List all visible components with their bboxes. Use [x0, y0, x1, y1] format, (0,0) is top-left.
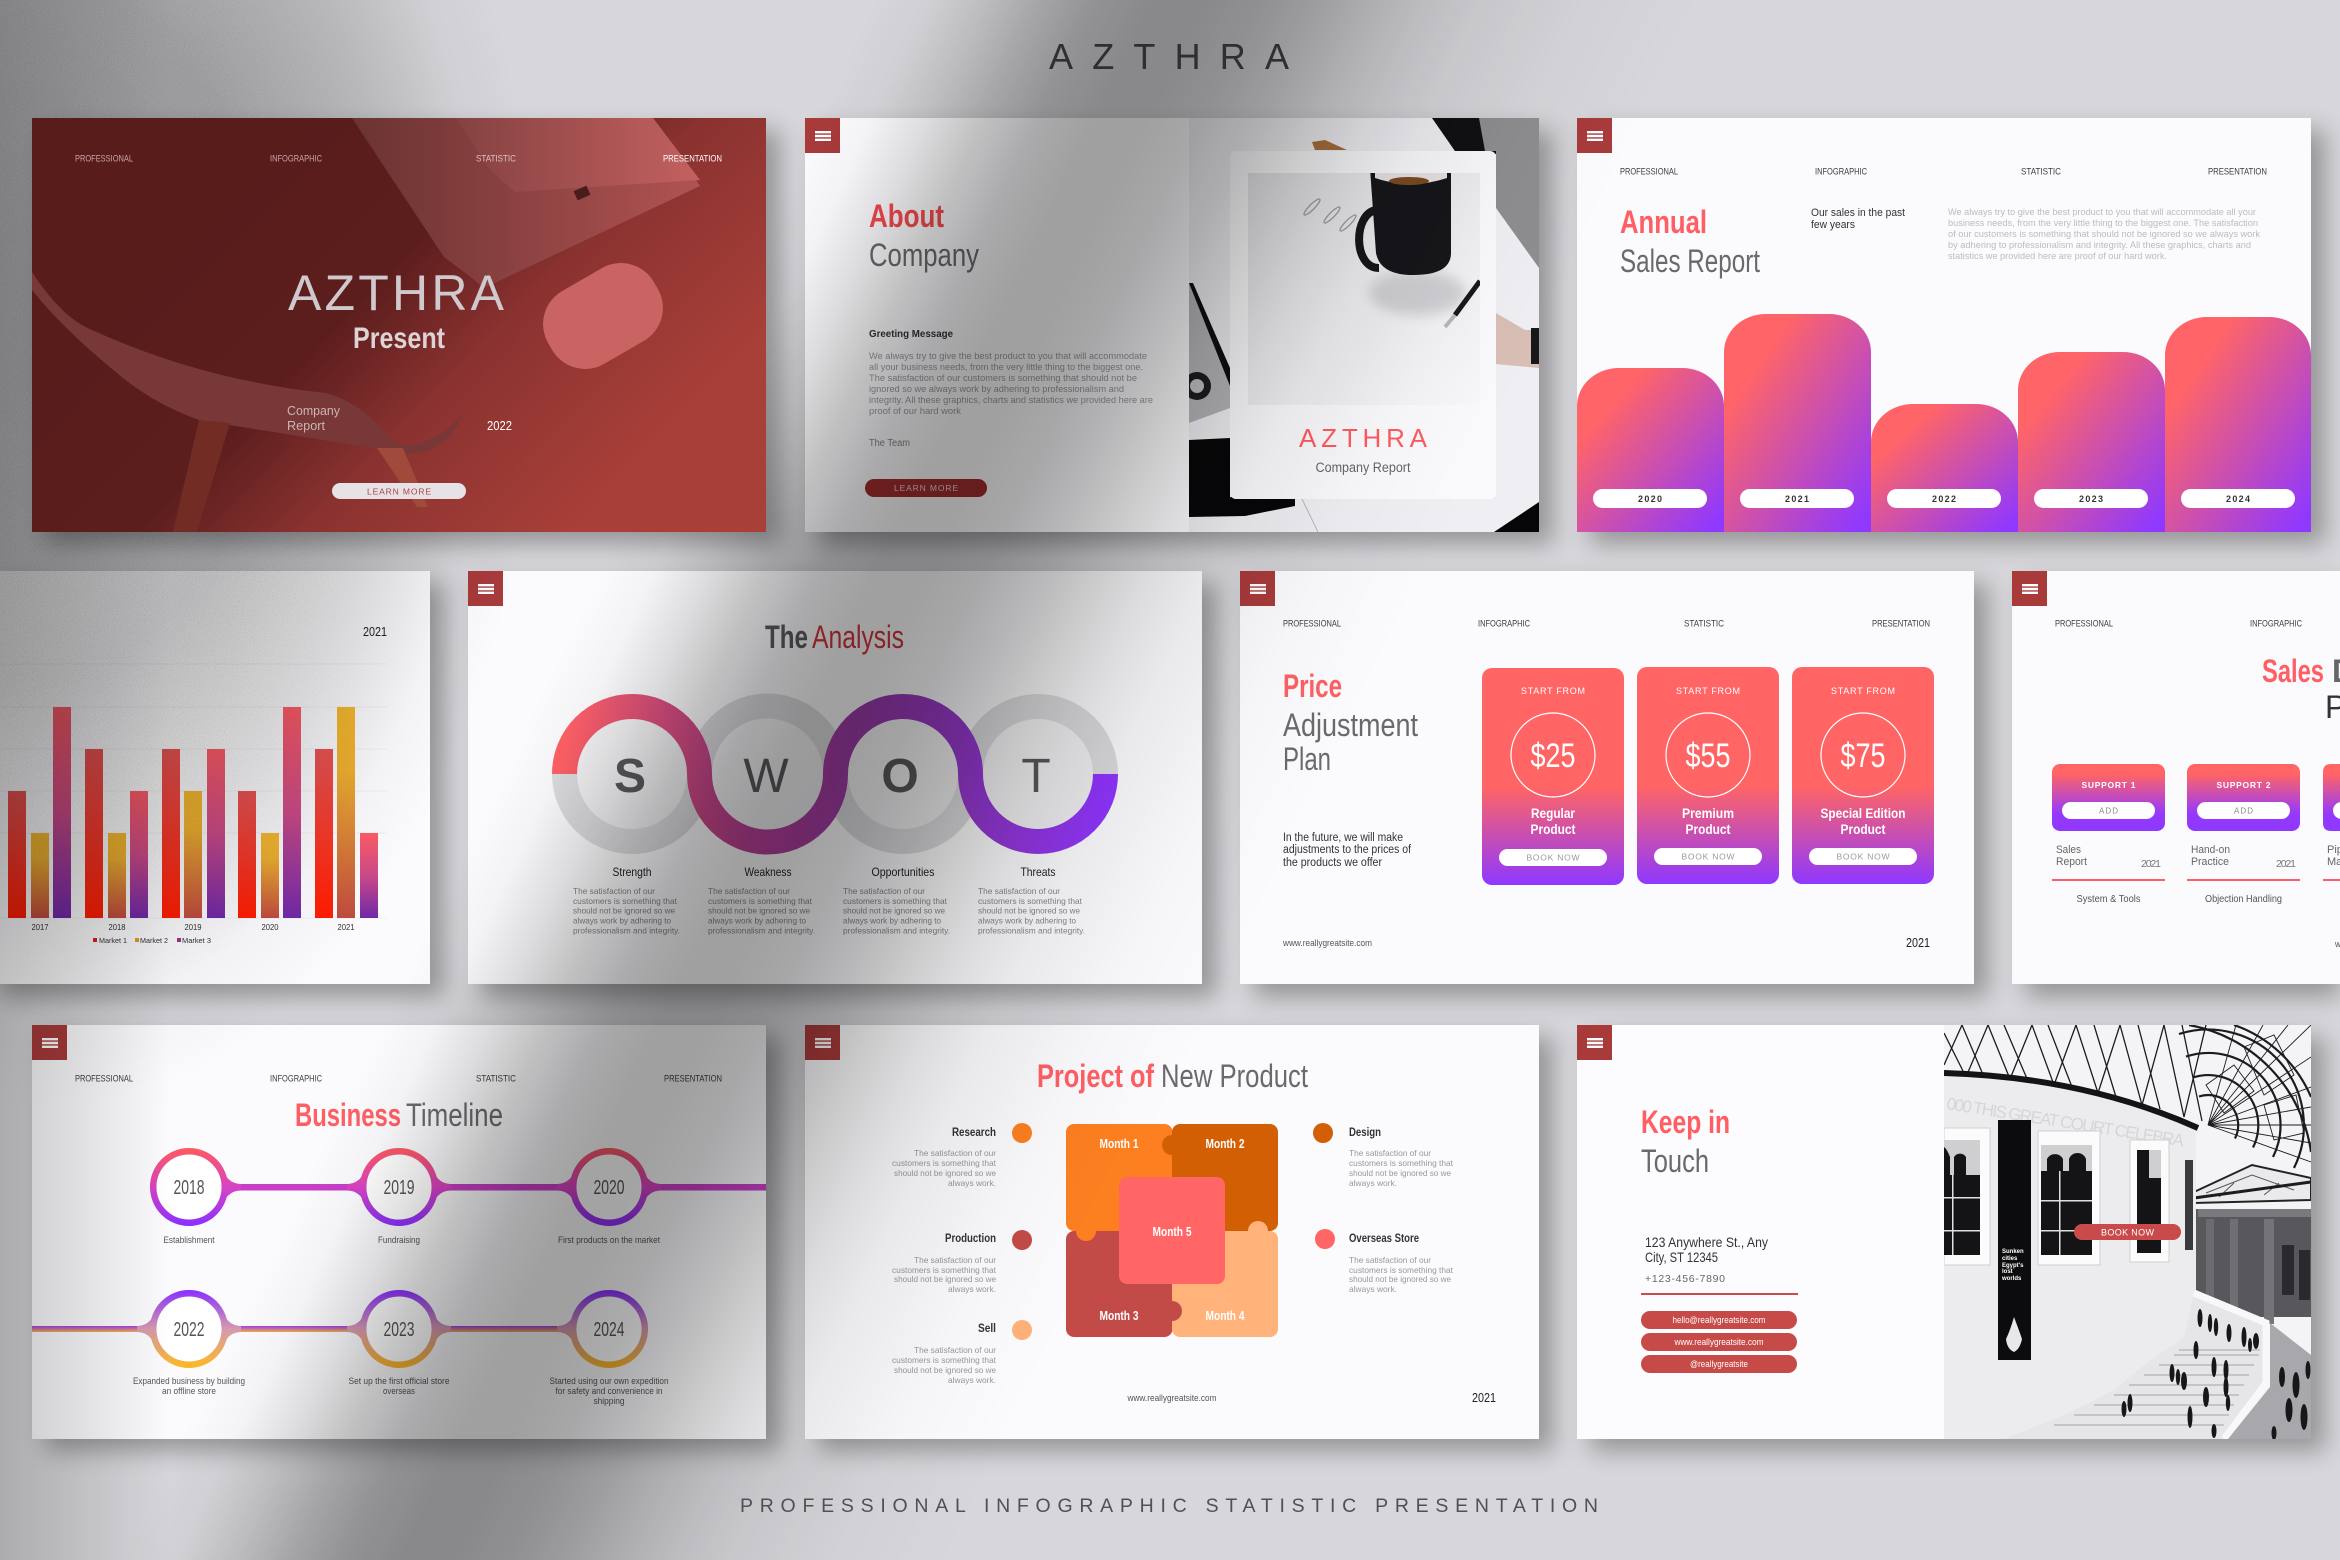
heading: About Company [869, 198, 979, 273]
column: Threats: should not be ignored so we [978, 906, 1080, 916]
heading: Annual Sales Report: Sales Report [1620, 243, 1760, 279]
support card 1: SUPPORT 1 [2082, 780, 2136, 790]
heading: Keep in Touch [1641, 1104, 1730, 1179]
column: Threats [978, 865, 1085, 936]
contact pills [1641, 1311, 1797, 1373]
item: production: Production [945, 1231, 996, 1245]
navigation labels: STATISTIC [1684, 618, 1724, 630]
heading: Annual Sales Report [1620, 204, 1760, 279]
contact pills: @reallygreatsite [1690, 1359, 1748, 1370]
milestone 2019: 2019 [384, 1177, 414, 1199]
exhibition banner: Sunken [2002, 1249, 2024, 1255]
legend: Market 2 [140, 936, 168, 945]
price card: premium product: Product [1686, 822, 1731, 837]
panel: annual sales report slide [1577, 118, 2311, 532]
text: price note: adjustments to the prices of [1283, 844, 1412, 856]
item: sell: Sell [978, 1321, 996, 1335]
column: Strength: always work by adhering to [573, 916, 671, 926]
text: price note [1283, 832, 1412, 869]
piece: month 2: Month 2 [1206, 1137, 1245, 1151]
piece: month 4: Month 4 [1206, 1309, 1245, 1323]
column: Threats: customers is something that [978, 896, 1083, 906]
milestone 2020 [558, 1151, 660, 1246]
text: address and phone: 123 Anywhere St., Any [1645, 1234, 1768, 1250]
item: design: should not be ignored so we [1349, 1168, 1451, 1178]
footer: website and year: 2021 [1472, 1390, 1496, 1405]
title: AZTHRA Present [288, 265, 505, 355]
button: book now [2074, 1224, 2181, 1240]
title: AZTHRA [1049, 36, 1289, 77]
navigation labels: PRESENTATION [663, 154, 722, 164]
price card: premium product [1637, 667, 1779, 884]
letter W: W [743, 750, 789, 803]
heading: Keep in Touch: Keep in [1641, 1104, 1730, 1140]
navigation labels: STATISTIC [2021, 166, 2061, 178]
milestone 2023 [348, 1293, 450, 1397]
column: Weakness [708, 865, 815, 936]
menu icon [805, 1025, 840, 1060]
price card: special edition product [1792, 667, 1934, 884]
piece: month 5 [1119, 1177, 1225, 1284]
navigation labels: INFOGRAPHIC [270, 1074, 322, 1084]
windows [1944, 1128, 2193, 1265]
navigation labels: PROFESSIONAL [1283, 618, 1341, 630]
item: sales report: Report [2056, 856, 2087, 868]
milestone 2024: 2024 [594, 1319, 624, 1341]
menu icon [1240, 571, 1275, 606]
heading: About Company: About [869, 198, 944, 234]
piece: month 1 [1066, 1124, 1172, 1231]
text: sales subtitle: Our sales in the past [1811, 207, 1905, 219]
button: book now: BOOK NOW [2101, 1228, 2154, 1238]
bar 2024: 2024 [2226, 494, 2250, 504]
column: Threats: Threats [1020, 865, 1056, 879]
card: company report [1230, 151, 1496, 499]
piece: month 3 [1066, 1221, 1172, 1337]
milestone 2022 [133, 1293, 245, 1397]
navigation labels: PRESENTATION [664, 1074, 722, 1084]
text: greeting message: all your business needs, from the very little thing to the biggest one. [869, 362, 1143, 372]
column: Opportunities [843, 865, 950, 936]
menu icon [805, 118, 840, 153]
axis labels [32, 923, 355, 932]
column: Threats: always work by adhering to [978, 916, 1076, 926]
heading: Price Adjustment Plan [1283, 668, 1418, 777]
text: sales subtitle: few years [1811, 219, 1855, 231]
navigation labels [75, 154, 722, 164]
item: sell: customers is something that [892, 1355, 997, 1365]
footer: website and year: www.reallygreatsite.com [1282, 938, 1372, 949]
support card 2: SUPPORT 2 [2216, 780, 2271, 790]
text: company report and year: Report [287, 418, 325, 433]
column: Opportunities: should not be ignored so we [843, 906, 945, 916]
text: greeting message: proof of our hard work [869, 406, 962, 416]
navigation labels: PROFESSIONAL [75, 1074, 133, 1084]
bar 2022 [1871, 404, 2018, 532]
column: Opportunities: customers is something that [843, 896, 948, 906]
column: Strength: should not be ignored so we [573, 906, 675, 916]
item: overseas store [1315, 1229, 1454, 1294]
price card: regular product: $25 [1530, 737, 1576, 775]
navigation labels [1620, 166, 2267, 178]
item: design [1313, 1123, 1454, 1188]
text: price note: In the future, we will make [1283, 832, 1403, 844]
timeline row: 2018 to 2020 [153, 1151, 766, 1246]
text: sales paragraph: statistics we provided here are proof of our hard work. [1948, 251, 2167, 261]
button: learn more: LEARN MORE [894, 483, 958, 493]
footer: website and year: www.reallygreatsite.com [1127, 1393, 1217, 1404]
card: company report: AZTHRA [1299, 423, 1428, 453]
column: Strength: professionalism and integrity. [573, 926, 680, 936]
navigation labels: PRESENTATION [1872, 618, 1930, 630]
text: address and phone [1645, 1234, 1768, 1285]
text: address and phone: +123-456-7890 [1645, 1273, 1725, 1285]
bar 2020: 2020 [1638, 494, 1662, 504]
photo: laptop, mouse and chair [32, 118, 700, 532]
menu icon [32, 1025, 67, 1060]
button: learn more: LEARN MORE [367, 486, 431, 496]
item: production: customers is something that [892, 1265, 997, 1275]
footer: website and year [1127, 1390, 1496, 1405]
text: company report and year [287, 403, 512, 433]
item: hand-on practice: Objection Handling [2205, 894, 2282, 905]
milestone 2024 [550, 1293, 668, 1407]
letter T: T [1021, 750, 1051, 803]
support card 1 [2052, 764, 2165, 831]
item: design: always work. [1349, 1178, 1397, 1188]
support card 2 [2187, 764, 2300, 831]
item: sales report: 2021 [2141, 858, 2161, 870]
column: Weakness: The satisfaction of our [708, 886, 790, 896]
price card: regular product: Regular [1531, 806, 1576, 821]
photo: desk with laptop, tablet, shirt [1183, 118, 1539, 532]
axis labels: 2021 [338, 923, 355, 932]
heading: Business Timeline: Timeline [406, 1097, 503, 1133]
heading: Project of New Product [1037, 1058, 1308, 1094]
column: Opportunities: Opportunities [872, 865, 934, 879]
panel: cover slide [32, 118, 766, 532]
price card: premium product: BOOK NOW [1682, 852, 1734, 862]
item: hand-on practice: 2021 [2276, 858, 2296, 870]
footer: website and year: 2021 [1906, 935, 1930, 950]
text: company report and year: Company [287, 403, 340, 418]
panel: about company slide [805, 118, 1539, 532]
text: greeting message: The satisfaction of our customers is something that should not be [869, 373, 1137, 383]
navigation labels: PROFESSIONAL [75, 154, 133, 164]
panel: sales development program slide [2012, 571, 2340, 984]
column: Weakness: professionalism and integrity. [708, 926, 815, 936]
text: sales paragraph: by adhering to professionalism and integrity. All these graphics, charts and [1948, 240, 2251, 250]
panel: price adjustment plan slide [1240, 571, 1974, 984]
menu icon [468, 571, 503, 606]
item: sell: should not be ignored so we [894, 1365, 996, 1375]
bar chart: markets 2017 to 2021 [8, 707, 378, 918]
price card: special edition product: $75 [1840, 737, 1886, 775]
column: Weakness: Weakness [744, 865, 792, 879]
piece: month 4 [1162, 1221, 1278, 1337]
heading: Project of New Product: New Product [1161, 1058, 1308, 1094]
text: sales paragraph: We always try to give the best product to you that will accommodate all your [1948, 207, 2256, 217]
price card: regular product: START FROM [1521, 686, 1585, 696]
heading: Business Timeline: Business [295, 1097, 401, 1133]
bar 2023: 2023 [2079, 494, 2103, 504]
text: greeting message: Greeting Message [869, 328, 953, 340]
item: overseas store: always work. [1349, 1284, 1397, 1294]
contact pills: www.reallygreatsite.com [1674, 1337, 1764, 1348]
column: Strength: The satisfaction of our [573, 886, 655, 896]
footer tagline: PROFESSIONAL INFOGRAPHIC STATISTIC PRESENTATION [740, 1495, 1598, 1517]
item: hand-on practice [2187, 844, 2300, 905]
panel: SWOT analysis slide [468, 571, 1202, 984]
item: sales report: System & Tools [2076, 894, 2140, 905]
column: Threats: The satisfaction of our [978, 886, 1060, 896]
column: Threats: professionalism and integrity. [978, 926, 1085, 936]
item: production: always work. [948, 1284, 996, 1294]
photo: museum great court [1944, 1025, 2311, 1440]
legend: Market 3 [182, 936, 211, 945]
heading: Business Timeline [295, 1097, 503, 1133]
item: production [892, 1230, 1032, 1294]
exhibition banner: lost [2002, 1269, 2013, 1275]
bars 2021 [315, 707, 378, 918]
item: overseas store: The satisfaction of our [1349, 1255, 1431, 1265]
navigation labels: STATISTIC [476, 154, 516, 164]
milestone 2018: Establishment [164, 1235, 215, 1246]
item: pipeline management [2323, 844, 2340, 881]
item: overseas store: customers is something that [1349, 1265, 1454, 1275]
column: Weakness: should not be ignored so we [708, 906, 810, 916]
item: production: The satisfaction of our [914, 1255, 996, 1265]
price card: regular product [1482, 668, 1624, 885]
heading: The Analysis: The [765, 619, 808, 655]
text: greeting message: ignored so we always work by adhering to professionalism and [869, 384, 1124, 394]
navigation labels: INFOGRAPHIC [270, 154, 322, 164]
bars 2017 [8, 707, 71, 918]
item: research: customers is something that [892, 1158, 997, 1168]
navigation labels: PROFESSIONAL [2055, 618, 2113, 630]
item: sales report: Sales [2056, 844, 2081, 856]
heading: Project of New Product: Project of [1037, 1058, 1154, 1094]
axis labels: 2017 [32, 923, 49, 932]
navigation labels [75, 1074, 722, 1084]
bars 2018 [85, 749, 148, 918]
text: sales paragraph [1948, 207, 2261, 261]
piece: month 2 [1162, 1124, 1278, 1231]
panel: keep in touch slide [1577, 1025, 2311, 1440]
piece: month 1: Month 1 [1100, 1137, 1139, 1151]
price card: special edition product: Product [1840, 822, 1886, 837]
card: company report: Company Report [1316, 460, 1411, 475]
navigation labels: INFOGRAPHIC [1815, 166, 1867, 178]
axis labels: 2018 [108, 923, 126, 932]
item: sell: The satisfaction of our [914, 1345, 996, 1355]
bar 2024 [2165, 317, 2311, 532]
exhibition banner: worlds [2001, 1276, 2022, 1282]
milestone 2018 [153, 1151, 225, 1246]
column: Opportunities: always work by adhering to [843, 916, 941, 926]
item: sell: always work. [948, 1375, 996, 1385]
item: sell [892, 1320, 1032, 1385]
text: sales subtitle [1811, 207, 1905, 231]
milestone 2019: Fundraising [378, 1235, 420, 1246]
support card 2: ADD [2234, 806, 2253, 816]
milestone 2024: shipping [594, 1396, 624, 1407]
text: sales paragraph: business needs, from the very little thing to the biggest one. The satisfaction [1948, 218, 2258, 228]
item: sales report [2052, 844, 2165, 905]
item: research: Research [952, 1125, 996, 1139]
letter O: O [881, 750, 919, 803]
exhibition banner: cities [2002, 1256, 2018, 1262]
bar 2022: 2022 [1932, 494, 1956, 504]
text: sales paragraph: of our customers is something that should not be ignored so we always work [1948, 229, 2261, 239]
bars 2019 [162, 749, 225, 918]
photo: coffee mug, paper clips and pen [1302, 168, 1480, 327]
item: design: Design [1349, 1125, 1381, 1139]
item: production: should not be ignored so we [894, 1274, 996, 1284]
item: hand-on practice: Practice [2191, 856, 2229, 868]
timeline row: 2022 to 2024 [32, 1293, 668, 1407]
navigation labels [2055, 618, 2302, 630]
text: greeting message: integrity. All these graphics, charts and statistics we provided here are [869, 395, 1153, 405]
heading: Annual Sales Report: Annual [1620, 204, 1707, 240]
text: greeting message: The Team [869, 438, 910, 449]
milestone 2024: Started using our own expedition [550, 1376, 668, 1387]
price card: regular product: BOOK NOW [1526, 852, 1580, 862]
item: overseas store: should not be ignored so we [1349, 1274, 1451, 1284]
column: Opportunities: The satisfaction of our [843, 886, 925, 896]
item: research: should not be ignored so we [894, 1168, 996, 1178]
column: Weakness: customers is something that [708, 896, 813, 906]
heading: Sales Development Program [2262, 653, 2340, 725]
milestone 2022: an offline store [162, 1386, 216, 1397]
glass roof lattice [1944, 1025, 2311, 1168]
price card: premium product: START FROM [1676, 686, 1740, 696]
navigation labels [1283, 618, 1930, 630]
column: Strength: Strength [612, 865, 652, 879]
footer: website and year [1282, 935, 1930, 950]
navigation labels: PRESENTATION [2208, 166, 2267, 178]
price card: special edition product: START FROM [1831, 686, 1895, 696]
navigation labels: INFOGRAPHIC [1478, 618, 1530, 630]
photo: museum great court: 000 THIS GREAT COURT CELEBRA [1945, 1094, 2186, 1151]
bar 2021: 2021 [1785, 494, 1809, 504]
item: design: The satisfaction of our [1349, 1148, 1431, 1158]
heading: Price Adjustment Plan: Price [1283, 668, 1342, 704]
navigation labels: PROFESSIONAL [1620, 166, 1678, 178]
contact pills: hello@reallygreatsite.com [1672, 1315, 1766, 1326]
axis labels: 2020 [262, 923, 279, 932]
column: Weakness: always work by adhering to [708, 916, 806, 926]
panel: business timeline slide [32, 1025, 766, 1439]
portico building [2194, 1165, 2311, 1324]
milestone 2023: 2023 [384, 1319, 414, 1341]
puzzle diagram: months [1066, 1124, 1278, 1337]
price card: special edition product: BOOK NOW [1836, 852, 1890, 862]
item: hand-on practice: Hand-on [2191, 844, 2230, 856]
letter S: S [614, 750, 646, 803]
item: research [892, 1123, 1032, 1188]
bar 2020 [1577, 368, 1724, 532]
item: design: customers is something that [1349, 1158, 1454, 1168]
menu icon [2012, 571, 2047, 606]
menu icon [1577, 1025, 1612, 1060]
milestone 2020: 2020 [594, 1177, 624, 1199]
bar 2021 [1724, 314, 1871, 532]
title: AZTHRA Present: AZTHRA [288, 265, 505, 321]
exhibition banner [1998, 1120, 2031, 1360]
title: AZTHRA Present: Present [353, 322, 445, 355]
button: learn more [332, 483, 466, 499]
text: greeting message: We always try to give the best product to you that will accommodate [869, 351, 1147, 361]
legend: Market 1 [99, 936, 127, 945]
axis labels: 2019 [184, 923, 202, 932]
column: Strength [573, 865, 680, 936]
support card 3 [2323, 764, 2340, 831]
milestone 2020: First products on the market [558, 1235, 660, 1246]
menu icon [1577, 118, 1612, 153]
item: research: always work. [948, 1178, 996, 1188]
heading: The Analysis: Analysis [812, 619, 904, 655]
heading: The Analysis [765, 619, 904, 655]
exhibition banner: Egypt's [2002, 1263, 2024, 1269]
panel: market bar chart slide [0, 571, 430, 984]
button: learn more [865, 479, 987, 497]
legend [93, 936, 211, 945]
milestone 2023: Set up the first official store [348, 1376, 450, 1387]
bar chart: yearly sales [1577, 314, 2311, 532]
milestone 2022: Expanded business by building [133, 1376, 245, 1387]
column: Strength: customers is something that [573, 896, 678, 906]
text: greeting message [869, 328, 1153, 449]
label: year 2021: 2021 [363, 624, 387, 639]
heading: Price Adjustment Plan: Adjustment [1283, 707, 1418, 743]
milestone 2024: for safety and convenience in [556, 1386, 662, 1397]
price card: premium product: Premium [1682, 806, 1734, 821]
support card 1: ADD [2099, 806, 2118, 816]
piece: month 3: Month 3 [1100, 1309, 1139, 1323]
price card: regular product: Product [1530, 822, 1576, 837]
item: research: The satisfaction of our [914, 1148, 996, 1158]
heading: About Company: Company [869, 237, 979, 273]
price card: premium product: $55 [1686, 737, 1730, 775]
item: overseas store: Overseas Store [1349, 1231, 1419, 1245]
piece: month 5: Month 5 [1152, 1225, 1192, 1239]
milestone 2019 [363, 1151, 435, 1246]
column: Opportunities: professionalism and integrity. [843, 926, 950, 936]
bars 2020 [238, 707, 301, 918]
circular reading room drum [1965, 1076, 2196, 1204]
navigation labels: INFOGRAPHIC [2250, 618, 2302, 630]
text: address and phone: City, ST 12345 [1645, 1249, 1718, 1265]
text: company report and year: 2022 [487, 418, 512, 433]
milestone 2022: 2022 [174, 1319, 204, 1341]
staircase and visitors [2004, 1292, 2311, 1440]
price card: special edition product: Special Edition [1820, 806, 1906, 821]
panel: project of new product slide [805, 1025, 1539, 1439]
text: price note: the products we offer [1283, 857, 1382, 869]
bar 2023 [2018, 352, 2165, 532]
diagram: SWOT ribbon [564, 706, 1106, 842]
heading: Keep in Touch: Touch [1641, 1143, 1709, 1179]
milestone 2018: 2018 [174, 1177, 204, 1199]
heading: Price Adjustment Plan: Plan [1283, 741, 1331, 777]
navigation labels: STATISTIC [476, 1074, 516, 1084]
milestone 2023: overseas [383, 1386, 415, 1397]
